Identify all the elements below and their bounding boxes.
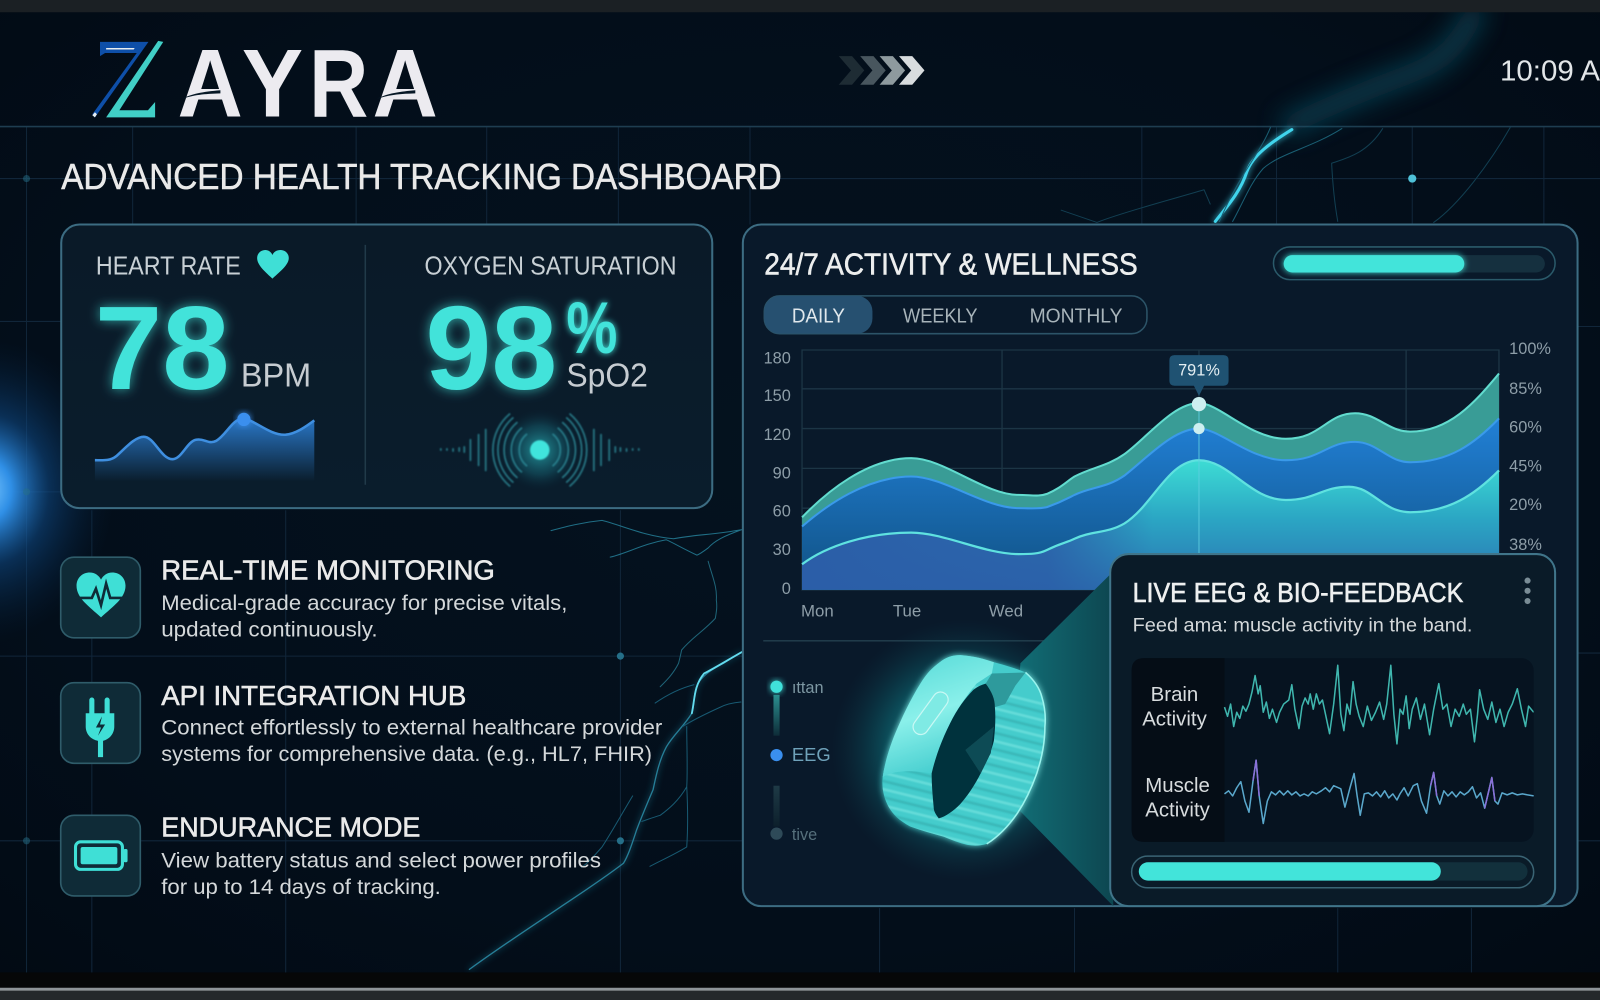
right axis labels (1509, 340, 1551, 554)
heart rate label: HEART RATE (96, 252, 241, 280)
wristband glow (832, 619, 1097, 881)
feature: endurance mode (61, 812, 601, 899)
legend: tive (792, 826, 817, 844)
progress bar: top (1273, 247, 1555, 280)
icon: battery (61, 815, 140, 896)
right axis labels: 20% (1509, 496, 1542, 514)
logo wordmark: A (372, 28, 438, 137)
series: lower band (802, 460, 1499, 590)
left axis labels: 90 (773, 465, 791, 483)
panel heading: LIVE EEG & BIO-FEEDBACK (1133, 577, 1464, 608)
x axis labels: Wed (989, 601, 1023, 620)
area chart (764, 340, 1551, 620)
range tabs: WEEKLY (903, 305, 978, 327)
heading: ENDURANCE MODE (161, 812, 420, 843)
logo wordmark: A (178, 28, 243, 137)
legend (770, 679, 831, 844)
oxygen value: 98 (426, 283, 557, 415)
description: systems for comprehensive data. (e.g., HL7, FHIR) (161, 742, 652, 766)
panel heading: 24/7 ACTIVITY & WELLNESS (764, 247, 1138, 281)
description: Medical-grade accuracy for precise vitals, (161, 591, 567, 615)
left axis labels (764, 349, 791, 598)
right axis labels: 100% (1509, 340, 1551, 358)
logo wordmark (178, 28, 438, 137)
x axis labels (801, 601, 1023, 620)
logo wordmark: R (309, 28, 368, 137)
description: updated continuously. (161, 618, 378, 642)
icon: plug (61, 683, 140, 763)
legend: ıttan (792, 679, 824, 697)
left axis labels: 60 (773, 502, 791, 520)
muscle activity label (1145, 775, 1211, 821)
x axis labels: Mon (801, 601, 834, 620)
logo mark Z (92, 41, 163, 117)
panel: vitals (61, 224, 712, 508)
x axis labels: Tue (893, 601, 921, 620)
feature: real-time monitoring (61, 555, 567, 642)
chevron arrows (839, 56, 924, 85)
heart rate section (95, 250, 314, 482)
left axis labels: 30 (773, 541, 791, 559)
heart rate value: 78 (95, 283, 230, 415)
feature: api integration hub (61, 680, 662, 766)
description: View battery status and select power profiles (161, 848, 601, 872)
series: top band (802, 373, 1499, 590)
percent sign: % (566, 286, 617, 369)
bottom bezel (0, 972, 1600, 1000)
menu dots (1524, 578, 1531, 604)
left axis labels: 0 (782, 580, 791, 598)
icon: heart (257, 250, 289, 279)
lightning: top right (1061, 14, 1510, 222)
panel: activity and wellness (743, 224, 1578, 906)
heading: REAL-TIME MONITORING (161, 555, 495, 586)
callout wedge (1010, 571, 1113, 906)
muscle activity wave (1224, 760, 1534, 823)
right axis labels: 38% (1509, 536, 1542, 554)
brain activity label (1142, 684, 1208, 731)
heart rate unit: BPM (241, 358, 311, 395)
panel description: Feed ama: muscle activity in the band. (1133, 615, 1472, 637)
heading: API INTEGRATION HUB (161, 680, 466, 711)
top bezel (0, 0, 1600, 12)
left axis labels: 120 (764, 426, 791, 444)
series: middle band (802, 418, 1499, 590)
left axis labels: 180 (764, 349, 791, 367)
oxygen unit: SpO2 (566, 358, 648, 395)
title: ADVANCED HEALTH TRACKING DASHBOARD (61, 157, 782, 197)
tooltip: 791% (1178, 362, 1220, 380)
range tabs: MONTHLY (1030, 305, 1123, 327)
brain activity label: Activity (1142, 709, 1208, 731)
clock: 10:09 A (1500, 56, 1600, 88)
oxygen section (424, 252, 677, 491)
progress bar: bottom (1132, 856, 1534, 888)
description: for up to 14 days of tracking. (161, 875, 441, 899)
description (161, 848, 601, 899)
logo (92, 28, 438, 137)
lightning: centre (469, 520, 742, 969)
oxygen label: OXYGEN SATURATION (424, 252, 677, 280)
range tabs (764, 296, 1147, 334)
waveform box (1132, 658, 1534, 842)
right axis labels: 45% (1509, 457, 1542, 475)
muscle activity label: Activity (1145, 799, 1211, 821)
logo wordmark: Y (242, 28, 303, 137)
wristband illustration (878, 655, 1051, 863)
left axis labels: 150 (764, 387, 791, 405)
right axis labels: 60% (1509, 419, 1542, 437)
brain activity wave (1224, 665, 1534, 744)
description (161, 716, 662, 766)
right axis labels: 85% (1509, 380, 1542, 398)
marker line (1198, 404, 1200, 590)
muscle activity label: Muscle (1145, 775, 1210, 797)
heart rate sparkline (95, 413, 314, 482)
pulse waveform (441, 409, 639, 491)
legend: EEG (792, 744, 831, 765)
tooltip (1169, 355, 1229, 396)
icon: heart pulse (61, 557, 140, 638)
description (161, 591, 567, 642)
panel: live eeg (1110, 554, 1555, 906)
description: Connect effortlessly to external healthcare provider (161, 716, 662, 740)
brain activity label: Brain (1151, 684, 1198, 706)
marker dots (1192, 397, 1206, 434)
range tabs: DAILY (792, 305, 845, 327)
